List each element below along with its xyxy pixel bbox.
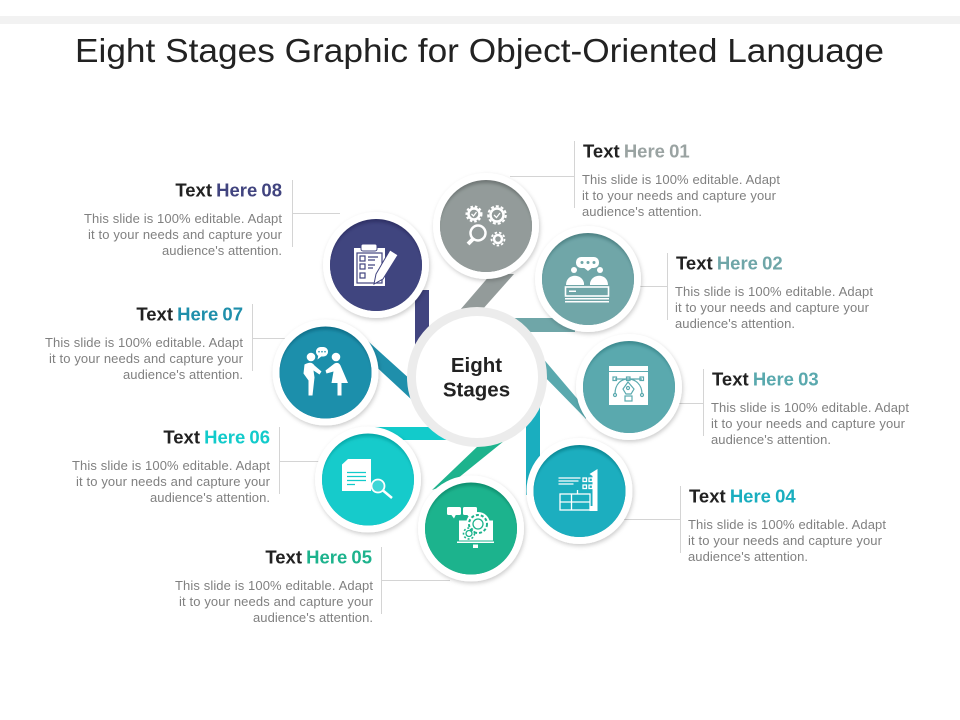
label 08: audience's attention. (162, 243, 282, 258)
label 01: Text Here 01 (583, 140, 690, 162)
center circle: Eight (451, 354, 502, 377)
label 04: This slide is 100% editable. Adapt (688, 517, 886, 532)
label 07 (45, 304, 244, 382)
stage 03 circle (576, 334, 682, 440)
label 03 (711, 368, 909, 447)
label 01: audience's attention. (582, 204, 702, 219)
center circle (407, 307, 547, 447)
label 07: it to your needs and capture your (49, 351, 244, 366)
label 01: This slide is 100% editable. Adapt (582, 172, 780, 187)
icon: monitor with gears (447, 507, 494, 548)
stage 04 circle (526, 438, 632, 544)
label 03: audience's attention. (711, 432, 831, 447)
stage 08 circle (323, 212, 429, 318)
icon: gears and magnifier (466, 206, 506, 246)
label 02 (675, 252, 873, 331)
icon: meeting at desk (565, 257, 609, 302)
label 03: This slide is 100% editable. Adapt (711, 400, 909, 415)
label 06: it to your needs and capture your (76, 474, 271, 489)
stage 07 circle (272, 320, 378, 426)
label 08: it to your needs and capture your (88, 227, 283, 242)
label 05 (175, 546, 374, 625)
label 04: it to your needs and capture your (688, 533, 883, 548)
label 06: audience's attention. (150, 490, 270, 505)
stage 05 circle (418, 476, 524, 582)
label 03: it to your needs and capture your (711, 416, 906, 431)
label 02: audience's attention. (675, 316, 795, 331)
label 07: Text Here 07 (136, 304, 243, 324)
label 01 (582, 140, 780, 219)
label 05: it to your needs and capture your (179, 594, 374, 609)
icon: two people talking (304, 347, 348, 396)
icon: document and magnifier (342, 459, 392, 498)
label 04: Text Here 04 (689, 486, 796, 506)
label 06: Text Here 06 (163, 426, 270, 448)
label 03: Text Here 03 (712, 368, 819, 390)
title: Eight Stages Graphic for Object-Oriented Language (75, 32, 884, 69)
connectors (360, 274, 586, 495)
leader lines (252, 141, 704, 614)
center circle: Stages (443, 378, 510, 402)
label 04: audience's attention. (688, 549, 808, 564)
label 08: Text Here 08 (175, 180, 282, 200)
icon: blueprint (558, 469, 598, 511)
label 02: Text Here 02 (676, 252, 783, 274)
stage 02 circle (535, 226, 641, 332)
label 05: Text Here 05 (265, 546, 372, 568)
label 05: audience's attention. (253, 610, 373, 625)
stage 01 circle (433, 173, 539, 279)
label 05: This slide is 100% editable. Adapt (175, 578, 373, 593)
stage 06 circle (315, 426, 421, 532)
label 06: This slide is 100% editable. Adapt (72, 458, 270, 473)
icon: vector pen tool window (609, 366, 648, 405)
label 02: it to your needs and capture your (675, 300, 870, 315)
label 08: This slide is 100% editable. Adapt (84, 211, 282, 226)
label 07: audience's attention. (123, 367, 243, 382)
label 01: it to your needs and capture your (582, 188, 777, 203)
label 06 (72, 426, 271, 505)
label 08 (84, 180, 283, 258)
label 02: This slide is 100% editable. Adapt (675, 284, 873, 299)
label 04 (688, 486, 886, 564)
label 07: This slide is 100% editable. Adapt (45, 335, 243, 350)
icon: clipboard and pen (354, 244, 398, 286)
